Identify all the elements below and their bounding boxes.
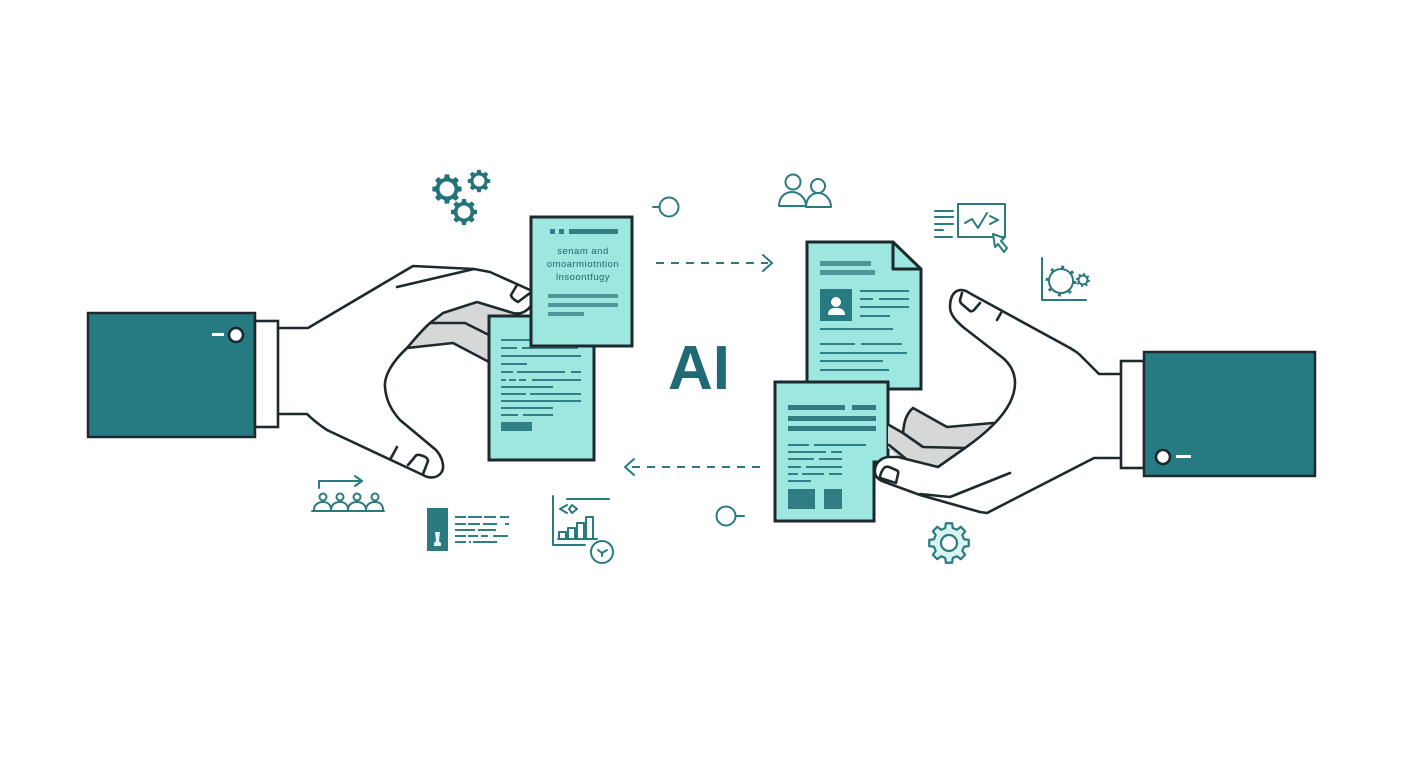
left finger nail bbox=[511, 285, 530, 302]
left sleeve bbox=[88, 313, 255, 437]
left cuff bbox=[255, 321, 278, 427]
left hand outline bbox=[278, 266, 530, 477]
right hand outline bbox=[875, 290, 1121, 513]
left sleeve button bbox=[212, 328, 243, 342]
icon: gear outline bbox=[929, 523, 969, 563]
right cuff bbox=[1121, 361, 1144, 468]
icon: team with arrow bbox=[312, 476, 384, 511]
image blocks bbox=[788, 489, 842, 509]
text lines bbox=[501, 339, 581, 431]
icon: three gears bbox=[432, 170, 490, 225]
folded corner bbox=[893, 242, 921, 269]
icon: ID card with lines bbox=[427, 508, 509, 551]
icon: bar chart with clock bbox=[553, 496, 613, 563]
left palm creases bbox=[407, 323, 489, 362]
right hand fill bbox=[875, 290, 1121, 513]
arrow: bottom dashed left bbox=[625, 459, 760, 475]
left thumb nail bbox=[391, 447, 428, 474]
document: front right bbox=[775, 382, 888, 521]
right nail upper bbox=[960, 293, 1001, 320]
left hand with sleeve bbox=[88, 266, 530, 477]
node: bottom circle bbox=[716, 506, 744, 526]
right nail lower bbox=[880, 467, 898, 483]
body bars bbox=[548, 294, 618, 316]
right palm gray shading bbox=[888, 408, 993, 467]
document: front left with text: lnsoontfugy bbox=[556, 272, 610, 283]
left palm gray shading bbox=[407, 302, 530, 370]
node: top circle bbox=[653, 198, 678, 216]
document: front left with text: omoarmiotntion bbox=[547, 259, 619, 270]
right hand with sleeve bbox=[875, 290, 1315, 513]
heading bars bbox=[820, 261, 875, 275]
heading bars bbox=[788, 405, 876, 431]
text lines bbox=[788, 444, 866, 482]
right palm creases bbox=[889, 408, 993, 458]
arrow: top dashed right bbox=[656, 255, 772, 271]
right sleeve bbox=[1144, 352, 1315, 476]
header bars bbox=[550, 229, 618, 234]
document text: senam and bbox=[557, 246, 609, 257]
icon: gear chart bbox=[1042, 258, 1089, 300]
text lines bbox=[820, 290, 909, 371]
title: AI: AI bbox=[668, 334, 730, 403]
icon: two people bbox=[779, 174, 831, 207]
icon: code screen with cursor bbox=[935, 204, 1007, 252]
document: back right with photo bbox=[807, 242, 921, 389]
document: back left bbox=[489, 316, 594, 460]
profile photo bbox=[820, 289, 852, 321]
document: front left with text bbox=[531, 217, 632, 346]
right thumb line bbox=[920, 473, 1010, 497]
right sleeve button bbox=[1156, 450, 1191, 464]
